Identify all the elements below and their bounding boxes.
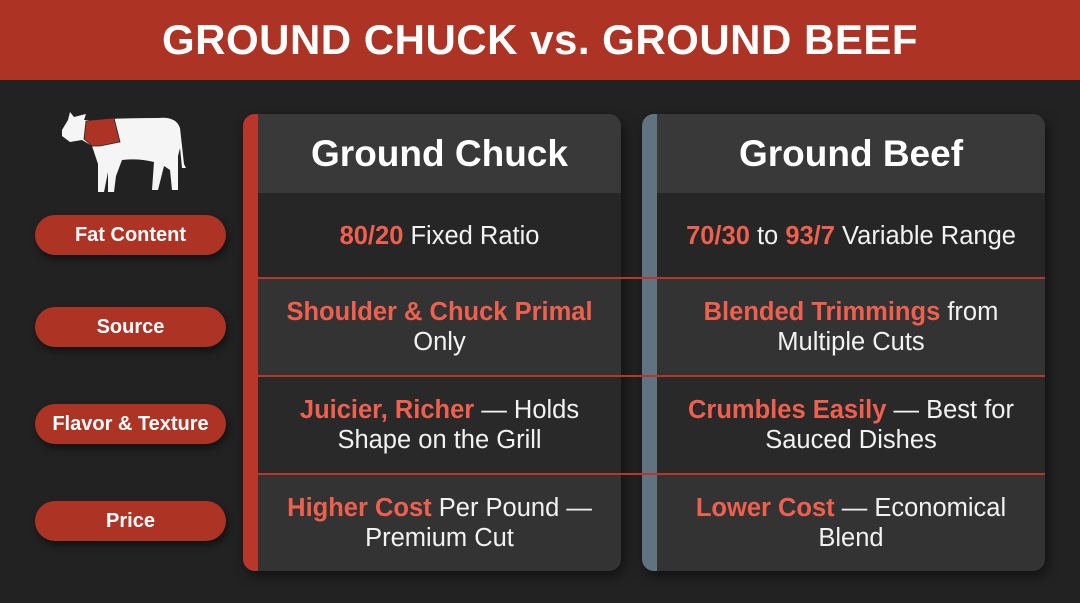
title: GROUND CHUCK vs. GROUND BEEF (162, 16, 918, 63)
pill: Price: Price (106, 510, 155, 532)
panel: ground chuck (243, 114, 621, 571)
pill: Source (35, 307, 226, 347)
text: chuck source: Only (413, 328, 466, 356)
text: chuck price: Premium Cut (365, 524, 514, 552)
text: beef flavor: Sauced Dishes (765, 426, 937, 454)
title (0, 0, 1080, 80)
text: beef fat: 70/30 to 93/7 Variable Range (686, 222, 1016, 250)
text: chuck flavor: Juicier, Richer — Holds (300, 396, 579, 424)
text: beef price: Lower Cost — Economical (696, 494, 1006, 522)
text: chuck fat (258, 193, 621, 278)
text: beef price: Blend (818, 524, 884, 552)
heading: ground chuck (258, 114, 621, 193)
text: chuck price (258, 474, 621, 571)
text: beef source: Blended Trimmings from (704, 298, 998, 326)
text: beef flavor (657, 376, 1045, 474)
pill: Fat Content: Fat Content (75, 224, 186, 246)
pill: Flavor & Texture (35, 404, 226, 444)
text: beef flavor: Crumbles Easily — Best for (688, 396, 1014, 424)
text: beef source (657, 278, 1045, 376)
text: beef source: Multiple Cuts (777, 328, 925, 356)
text: beef fat (657, 193, 1045, 278)
text: chuck price: Higher Cost Per Pound — (287, 494, 592, 522)
icon: cow (62, 112, 186, 192)
pill: Source: Source (97, 316, 164, 338)
heading: ground beef (657, 114, 1045, 193)
text: beef price (657, 474, 1045, 571)
pill: Fat Content (35, 215, 226, 255)
text: chuck flavor: Shape on the Grill (337, 426, 542, 454)
text: chuck source: Shoulder & Chuck Primal (286, 298, 593, 326)
text: chuck source (258, 278, 621, 376)
text: chuck flavor (258, 376, 621, 474)
panel: ground beef (642, 114, 1045, 571)
text: chuck fat: 80/20 Fixed Ratio (340, 222, 539, 250)
heading: ground beef: Ground Beef (739, 132, 963, 174)
heading: ground chuck: Ground Chuck (311, 132, 568, 174)
pill: Price (35, 501, 226, 541)
pill: Flavor & Texture: Flavor & Texture (52, 412, 209, 434)
